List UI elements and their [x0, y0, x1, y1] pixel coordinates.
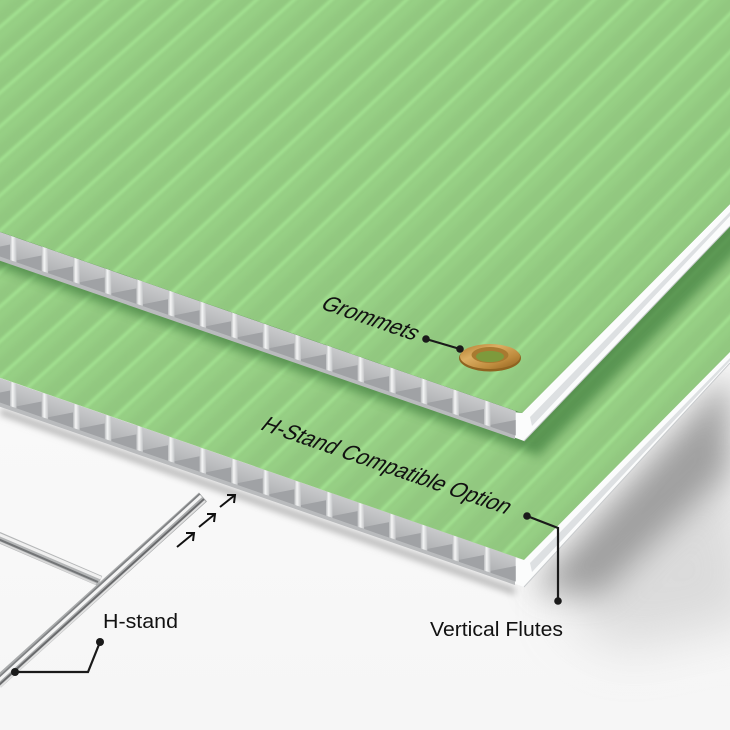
upper board white side edge: [513, 204, 730, 441]
label: H-Stand Compatible Option: H-Stand Compatible Option: [256, 413, 519, 518]
arrows: insertion direction: [177, 495, 235, 547]
leader line: vertical flutes: [523, 512, 562, 605]
label: Grommets: Grommets: [316, 292, 426, 345]
upper board green top surface: [0, 0, 730, 413]
label: Grommets: [316, 292, 464, 353]
label: Vertical Flutes: Vertical Flutes: [430, 619, 563, 641]
icon: brass grommet: [459, 344, 521, 372]
label: H-stand: [11, 611, 178, 676]
upper board flute cells: [0, 224, 516, 439]
illustration: H-stand wire frame: [0, 494, 205, 687]
leader line: H-stand: [11, 638, 104, 676]
lower board flute cells: [0, 370, 516, 585]
arrow 3: [220, 495, 235, 507]
panel: lower green board: [0, 204, 730, 588]
panel: upper green board: [0, 0, 730, 442]
lower board white side edge: [513, 352, 730, 587]
lower board green top surface: [0, 204, 730, 560]
arrow 1: [177, 533, 194, 547]
arrow 2: [199, 514, 215, 527]
label: H-stand: H-stand: [103, 611, 178, 633]
cross bar: [0, 534, 101, 584]
leader line: grommets: [422, 335, 464, 353]
main upright bar: [0, 494, 205, 687]
label: Vertical Flutes: [430, 512, 563, 641]
ground shadow of lower board: [0, 372, 730, 650]
